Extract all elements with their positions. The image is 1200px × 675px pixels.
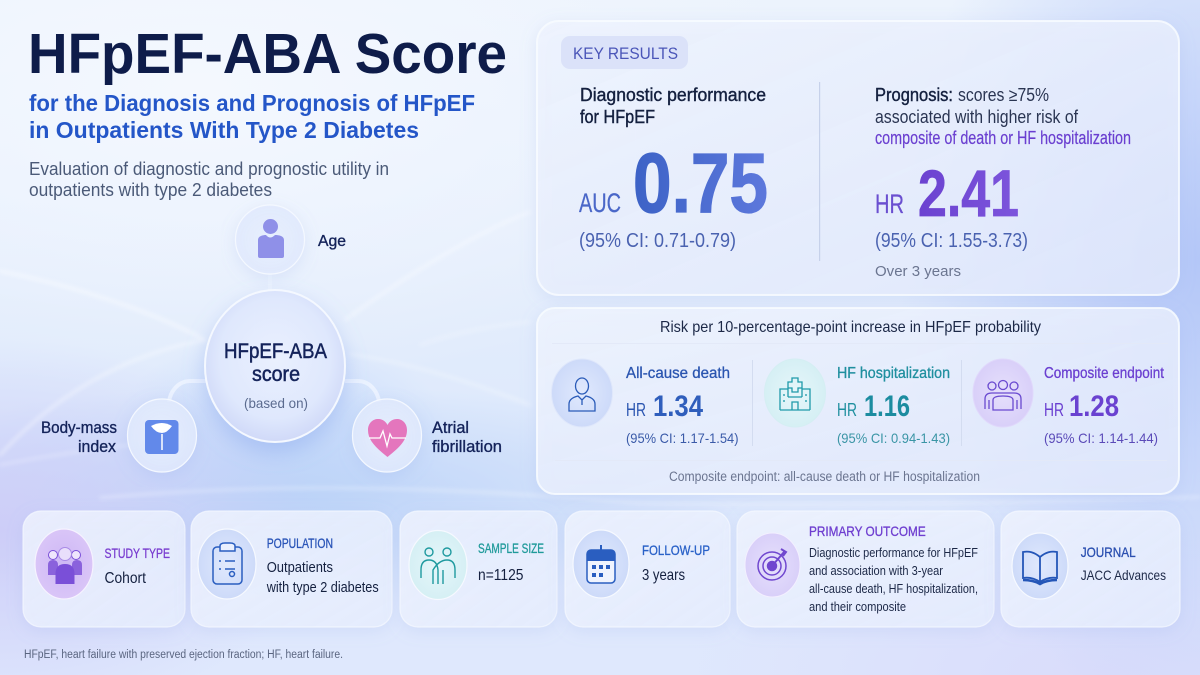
icon: scale bbox=[145, 420, 178, 454]
icon: target bbox=[758, 549, 786, 580]
card: primary outcome: all-cause death, HF hospitalization, bbox=[809, 582, 978, 596]
panel: key results bbox=[537, 21, 1179, 295]
card: sample size: n=1125 bbox=[478, 567, 524, 584]
subtitle: in Outpatients With Type 2 Diabetes bbox=[29, 117, 419, 143]
card: journal bbox=[1001, 511, 1180, 627]
age node bbox=[236, 205, 346, 274]
card: journal: JACC Advances bbox=[1081, 567, 1166, 583]
prognosis: HR bbox=[875, 189, 904, 219]
card: study type bbox=[23, 511, 185, 627]
body-mass index node bbox=[41, 399, 196, 472]
panel: risk per 10-percentage-point increase: Risk per 10-percentage-point increase in HFpEF probability bbox=[660, 319, 1041, 336]
composite endpoint bbox=[973, 359, 1164, 446]
card: primary outcome: and association with 3-year bbox=[809, 564, 943, 578]
atrial fibrillation node bbox=[352, 399, 502, 472]
subtitle: for the Diagnosis and Prognosis of HFpEF bbox=[29, 90, 475, 116]
body-mass index node: index bbox=[78, 438, 117, 456]
card: population: POPULATION bbox=[267, 536, 333, 551]
subtitle bbox=[29, 90, 475, 143]
card: journal: JOURNAL bbox=[1081, 544, 1136, 560]
prognosis: (95% CI: 1.55-3.73) bbox=[875, 230, 1028, 252]
diagnostic performance: AUC bbox=[579, 188, 621, 218]
diagnostic performance: for HFpEF bbox=[580, 107, 655, 127]
icon: clipboard bbox=[213, 543, 242, 584]
composite endpoint: (95% CI: 1.14-1.44) bbox=[1044, 430, 1158, 446]
all-cause death: All-cause death bbox=[626, 365, 730, 382]
hf hospitalization: HF hospitalization bbox=[837, 365, 950, 382]
all-cause death: 1.34 bbox=[653, 390, 703, 423]
all-cause death: HR bbox=[626, 400, 646, 420]
composite endpoint: Composite endpoint bbox=[1044, 365, 1164, 382]
diagnostic performance: Diagnostic performance bbox=[580, 85, 766, 105]
icon: hospital bbox=[780, 378, 810, 410]
card: study type: Cohort bbox=[104, 570, 146, 587]
age node: Age bbox=[318, 233, 346, 250]
card: follow-up: FOLLOW-UP bbox=[642, 543, 710, 558]
icon: group filled bbox=[48, 548, 82, 584]
icon: open book bbox=[1023, 552, 1057, 584]
central bubble: (based on) bbox=[244, 395, 308, 411]
central bubble: HFpEF-ABA bbox=[224, 340, 327, 363]
icon: calendar bbox=[587, 545, 615, 583]
prognosis: 2.41 bbox=[918, 156, 1019, 230]
description: outpatients with type 2 diabetes bbox=[29, 180, 272, 200]
connectors bbox=[169, 274, 379, 402]
footnote: HFpEF, heart failure with preserved ejection fraction; HF, heart failure. bbox=[24, 649, 343, 661]
title: HFpEF-ABA Score bbox=[28, 22, 507, 86]
icon: heart bbox=[368, 419, 407, 457]
score diagram bbox=[41, 205, 502, 472]
panel: risk per 10-percentage-point increase bbox=[537, 308, 1179, 494]
description: Evaluation of diagnostic and prognostic utility in bbox=[29, 159, 389, 179]
badge: key results: KEY RESULTS bbox=[573, 44, 678, 63]
badge: key results bbox=[561, 36, 688, 69]
composite endpoint note: Composite endpoint: all-cause death or HF hospitalization bbox=[669, 469, 980, 484]
card: primary outcome: Diagnostic performance for HFpEF bbox=[809, 546, 978, 560]
card: primary outcome: and their composite bbox=[809, 600, 906, 614]
hf hospitalization: 1.16 bbox=[864, 390, 910, 423]
description bbox=[29, 159, 389, 200]
composite endpoint: HR bbox=[1044, 400, 1064, 420]
prognosis: composite of death or HF hospitalization bbox=[875, 128, 1131, 148]
card: follow-up bbox=[565, 511, 730, 627]
prognosis: Over 3 years bbox=[875, 263, 961, 280]
hf hospitalization bbox=[764, 359, 950, 446]
prognosis: Prognosis: bbox=[875, 85, 953, 105]
prognosis: scores ≥75% bbox=[958, 85, 1049, 105]
icon: two people bbox=[421, 548, 455, 584]
card: primary outcome: PRIMARY OUTCOME bbox=[809, 524, 926, 539]
card: population: with type 2 diabetes bbox=[266, 579, 379, 596]
hf hospitalization: HR bbox=[837, 400, 857, 420]
all-cause death bbox=[552, 359, 738, 446]
icon: person bbox=[258, 219, 284, 258]
body-mass index node: Body-mass bbox=[41, 419, 117, 437]
diagnostic performance bbox=[579, 85, 768, 252]
all-cause death: (95% CI: 1.17-1.54) bbox=[626, 430, 738, 446]
diagnostic performance: (95% CI: 0.71-0.79) bbox=[579, 230, 736, 252]
prognosis bbox=[875, 85, 1131, 280]
diagnostic performance: 0.75 bbox=[633, 136, 768, 230]
hf hospitalization: (95% CI: 0.94-1.43) bbox=[837, 430, 950, 446]
card: population: Outpatients bbox=[267, 559, 333, 576]
atrial fibrillation node: Atrial bbox=[432, 419, 469, 437]
card: primary outcome bbox=[737, 511, 994, 627]
card: study type: STUDY TYPE bbox=[104, 546, 170, 561]
icon: person outline bbox=[569, 378, 595, 411]
card: follow-up: 3 years bbox=[642, 567, 685, 584]
icon: group bbox=[985, 380, 1021, 410]
atrial fibrillation node: fibrillation bbox=[432, 438, 502, 456]
central bubble bbox=[205, 290, 345, 442]
decorative light streaks bbox=[0, 212, 1200, 504]
central bubble: score bbox=[252, 363, 300, 386]
prognosis: associated with higher risk of bbox=[875, 107, 1079, 127]
card: sample size bbox=[400, 511, 557, 627]
card: population bbox=[191, 511, 392, 627]
composite endpoint: 1.28 bbox=[1069, 390, 1119, 423]
card: sample size: SAMPLE SIZE bbox=[478, 541, 544, 556]
